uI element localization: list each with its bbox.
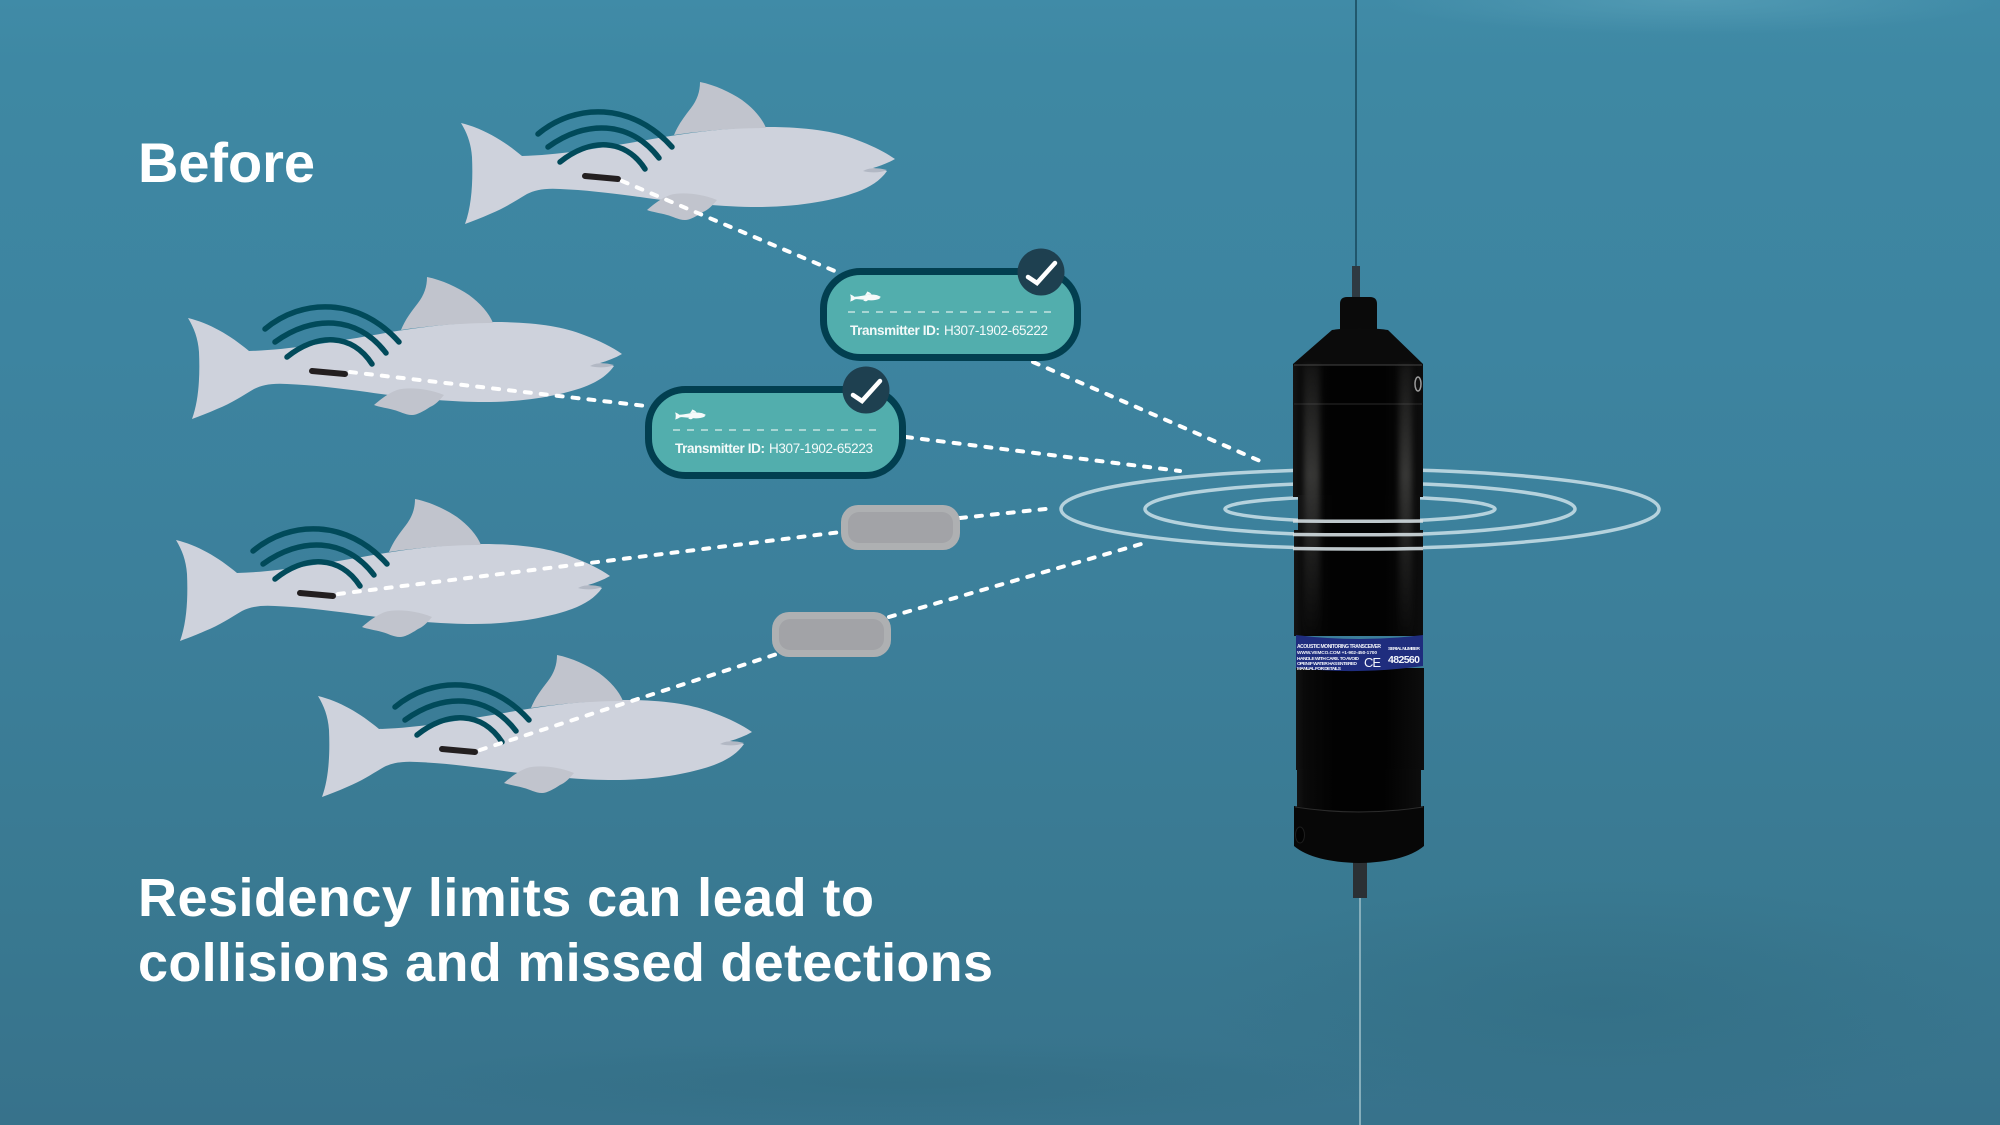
fish 1 with tag and signal waves bbox=[461, 82, 895, 224]
transmitter id text bbox=[675, 441, 873, 456]
icon: small fish bbox=[675, 409, 706, 420]
heading: Before: Before bbox=[138, 131, 315, 194]
caption: residency limits: Residency limits can lead to bbox=[138, 868, 874, 928]
fish 2 with tag and signal waves bbox=[188, 277, 622, 419]
fish 4 with tag and signal waves bbox=[318, 655, 752, 797]
sonar rings: front halves over receiver bbox=[1293, 521, 1423, 549]
transmitter id text: Transmitter ID: bbox=[850, 323, 940, 338]
transmitter id text: H307-1902-65223 bbox=[769, 441, 873, 456]
product label band: OPEN IF WATER HAS ENTERED bbox=[1297, 661, 1358, 667]
product label band: SERIAL NUMBER bbox=[1388, 646, 1421, 652]
dashed signal paths from fish to cards to receiver bbox=[338, 181, 1267, 750]
fish 3 with tag and signal waves bbox=[176, 499, 610, 641]
icon: check badge bbox=[842, 366, 890, 414]
product label band: 482560 bbox=[1388, 654, 1420, 666]
caption: residency limits: collisions and missed detections bbox=[138, 933, 993, 993]
transmitter id text: H307-1902-65222 bbox=[944, 323, 1048, 338]
card: transmitter H307-1902-65223 detected bbox=[648, 366, 902, 476]
icon: small fish bbox=[850, 291, 881, 302]
sonar rings: back halves bbox=[1061, 470, 1659, 548]
receiver cable top bbox=[1355, 0, 1357, 266]
icon: check badge bbox=[1018, 248, 1064, 296]
product label band: HANDLE WITH CARE. TO AVOID bbox=[1297, 656, 1360, 662]
product label band: CE bbox=[1364, 655, 1381, 670]
transmitter id text: Transmitter ID: bbox=[675, 441, 765, 456]
product label band: ACOUSTIC MONITORING TRANSCEIVER bbox=[1297, 644, 1381, 650]
card: transmitter H307-1902-65222 detected bbox=[824, 248, 1078, 358]
product label band: WWW.VEMCO.COM +1-902-450-1700 bbox=[1297, 650, 1377, 656]
product label band bbox=[1296, 635, 1423, 672]
acoustic receiver cylinder bbox=[1293, 266, 1424, 898]
receiver cable bottom bbox=[1359, 898, 1361, 1125]
card: missed detection, grey bbox=[841, 505, 960, 550]
product label band: MANUAL FOR DETAILS bbox=[1297, 666, 1342, 672]
card: missed detection, grey bbox=[772, 612, 891, 657]
cylinder highlights bbox=[1304, 365, 1412, 640]
transmitter id text bbox=[850, 323, 1048, 338]
